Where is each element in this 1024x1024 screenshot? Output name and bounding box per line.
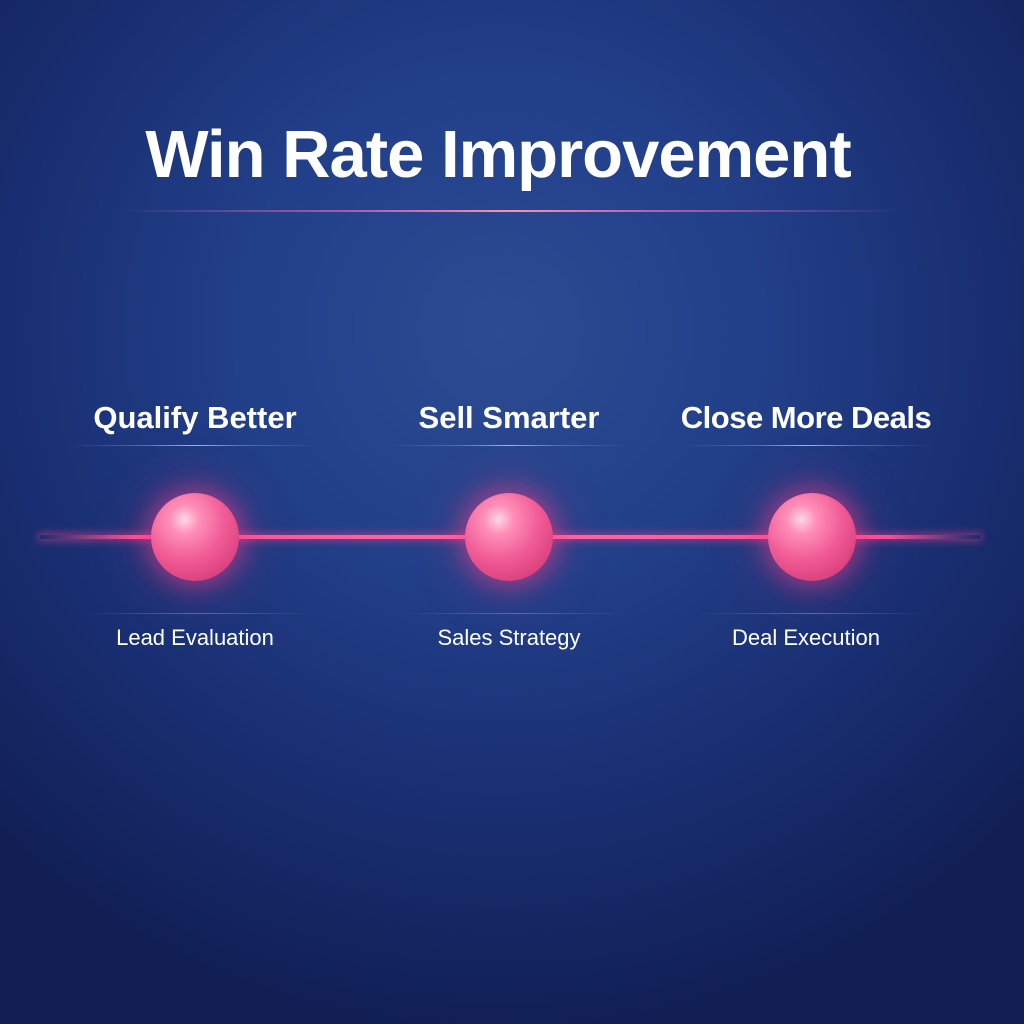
sphere — [465, 493, 553, 581]
label: Sales Strategy — [437, 625, 581, 650]
step 3 — [681, 400, 931, 650]
timeline line — [40, 535, 980, 539]
label: Deal Execution — [732, 625, 880, 650]
step 1 — [76, 400, 313, 650]
label: Lead Evaluation — [116, 625, 274, 650]
step 2 — [392, 400, 627, 650]
title: Win Rate Improvement — [145, 117, 851, 192]
sphere — [768, 493, 856, 581]
heading: Sell Smarter: Sell Smarter — [419, 400, 599, 435]
heading: Qualify Better: Qualify Better — [93, 400, 297, 435]
heading: Close More Deals: Close More Deals — [681, 400, 931, 435]
sphere — [151, 493, 239, 581]
